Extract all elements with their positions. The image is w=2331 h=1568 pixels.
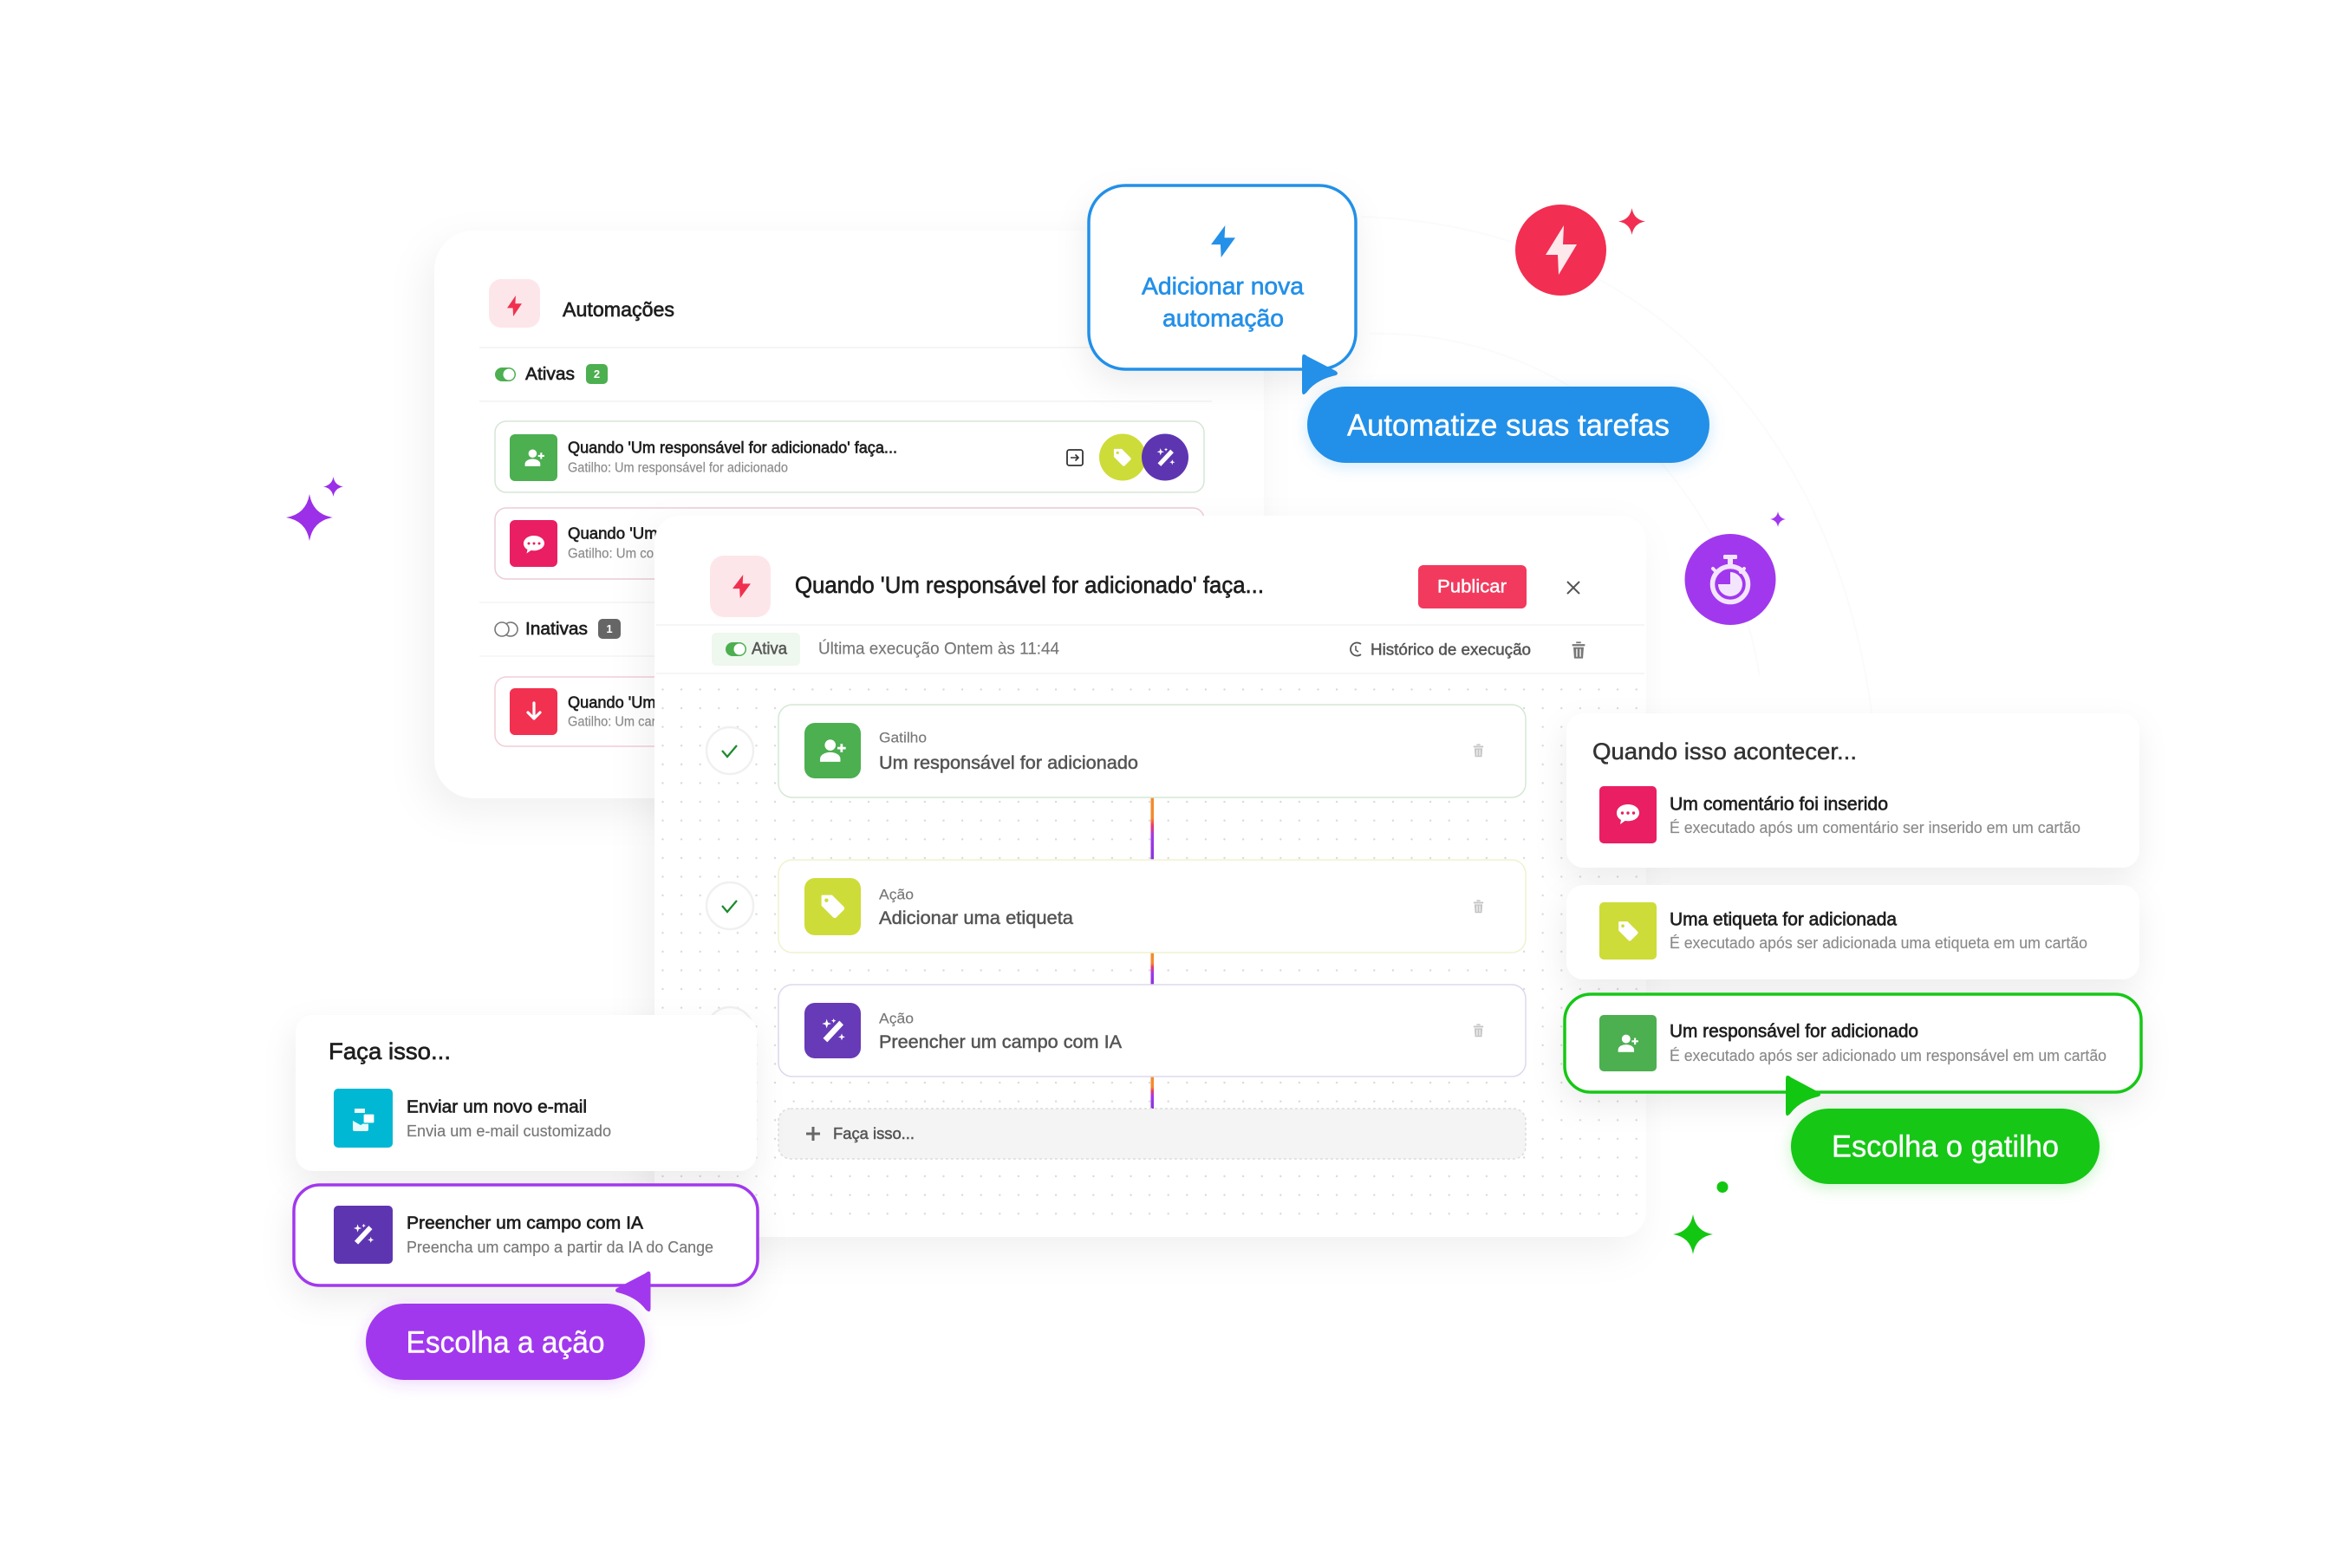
pill: Escolha o gatilho xyxy=(1791,1109,2100,1184)
card: add label action xyxy=(778,860,1526,953)
panel: action option AI selected xyxy=(294,1185,758,1285)
icon: green dot xyxy=(1716,1181,1729,1193)
panel: action option AI selected: Preencher um campo com IA xyxy=(407,1213,643,1233)
panel: trigger options heading and comment: Quando isso acontecer... xyxy=(1592,738,1857,764)
panel: action options heading and email: Enviar um novo e-mail xyxy=(407,1097,587,1116)
panel: trigger option label: É executado após ser adicionada uma etiqueta em um cartão xyxy=(1670,934,2087,952)
row: comment automation xyxy=(495,508,1204,579)
text: last execution: Última execução Ontem às 11:44 xyxy=(818,640,1059,659)
card: trigger step: Gatilho xyxy=(879,730,927,745)
panel: action option AI selected: Preencha um campo a partir da IA do Cange xyxy=(407,1239,713,1256)
callout: add new automation xyxy=(1089,185,1356,369)
callout: add new automation: Adicionar nova xyxy=(1142,272,1304,300)
panel: action options heading and email: Envia um e-mail customizado xyxy=(407,1122,611,1140)
panel: trigger options heading and comment: Um comentário foi inserido xyxy=(1670,794,1888,815)
pill: Escolha a ação xyxy=(366,1304,645,1380)
check: label action step xyxy=(706,882,753,929)
panel: trigger option label xyxy=(1566,885,2139,979)
heading: Automações: Automações xyxy=(563,298,674,321)
section: Inativas: 1 xyxy=(606,622,613,635)
panel: automation editor xyxy=(654,516,1646,1237)
arrow: purple cursor xyxy=(615,1272,650,1311)
decorative faint arcs xyxy=(1361,217,1872,719)
icon: close xyxy=(1567,582,1579,594)
card: trigger step: Um responsável for adicionado xyxy=(879,752,1138,773)
panel: trigger option responsible selected xyxy=(1565,994,2141,1092)
icon: purple sparkle small xyxy=(1770,511,1786,527)
pill: Escolha a ação: Escolha a ação xyxy=(406,1326,605,1359)
button: Publicar: Publicar xyxy=(1437,577,1507,596)
icon: editor bolt badge xyxy=(710,556,771,617)
panel: trigger options heading and comment: É executado após um comentário ser inserido em um cartão xyxy=(1670,819,2080,836)
card: trigger step xyxy=(778,705,1526,797)
button: Publicar xyxy=(1418,565,1527,608)
card: add label action: Ação xyxy=(879,886,914,903)
icon: automations bolt badge xyxy=(489,279,540,328)
connector: trigger to action xyxy=(1151,797,1154,860)
row: comment automation: Quando 'Um comentário foi inserido' faça... xyxy=(568,524,876,543)
row: responsible added automation: Gatilho: Um responsável for adicionado xyxy=(568,461,788,475)
section: Ativas: 2 xyxy=(594,368,600,381)
row: card moved automation xyxy=(495,677,1204,746)
panel: trigger option label: Uma etiqueta for adicionada xyxy=(1670,910,1897,929)
check: trigger step xyxy=(706,727,753,774)
row: card moved automation: Gatilho: Um cartão for movido xyxy=(568,714,736,730)
link: execution history: Histórico de execução xyxy=(1371,640,1531,659)
arrow: green cursor xyxy=(1786,1076,1820,1116)
section: Ativas xyxy=(495,364,608,384)
icon: stopwatch circle xyxy=(1685,534,1775,625)
card: add label action: Adicionar uma etiqueta xyxy=(879,908,1073,928)
icon: purple sparkle large xyxy=(286,494,333,541)
card: AI field action: Ação xyxy=(879,1011,914,1026)
row: responsible added automation: Quando 'Um responsável for adicionado' faça... xyxy=(568,439,897,456)
status: Ativa chip xyxy=(712,633,800,666)
panel: trigger options heading and comment xyxy=(1566,713,2139,868)
section: Inativas: Inativas xyxy=(525,620,588,639)
pill: Escolha o gatilho: Escolha o gatilho xyxy=(1832,1130,2059,1163)
callout: add new automation: automação xyxy=(1162,305,1284,331)
icon: green sparkle xyxy=(1673,1214,1713,1254)
panel: trigger option responsible selected: Um responsável for adicionado xyxy=(1670,1021,1918,1042)
button: add action: Faça isso... xyxy=(833,1125,915,1142)
heading: editor title: Quando 'Um responsável for adicionado' faça... xyxy=(795,572,1264,598)
icon: red sparkle xyxy=(1618,208,1645,235)
section: Inativas xyxy=(495,619,621,639)
arrow: blue cursor xyxy=(1302,355,1338,394)
row: responsible added automation xyxy=(495,421,1204,492)
check: AI action step xyxy=(706,1007,753,1054)
connector: action to action xyxy=(1151,953,1154,985)
panel: trigger option responsible selected: É executado após ser adicionado um responsável em um cartão xyxy=(1670,1047,2106,1064)
panel: action options heading and email xyxy=(296,1015,757,1171)
icon: purple sparkle tiny xyxy=(323,477,343,497)
status: Ativa chip: Ativa xyxy=(752,640,787,659)
row: card moved automation: Quando 'Um cartão for movido' faça... xyxy=(568,693,832,711)
panel: action options heading and email: Faça isso... xyxy=(329,1038,451,1064)
card: AI field action: Preencher um campo com IA xyxy=(879,1031,1123,1052)
card: AI field action xyxy=(778,985,1526,1077)
pill: Automatize suas tarefas xyxy=(1307,387,1709,463)
icon: red bolt circle xyxy=(1515,205,1606,296)
pill: Automatize suas tarefas: Automatize suas tarefas xyxy=(1347,409,1670,442)
row: comment automation: Gatilho: Um comentário foi inserido xyxy=(568,546,771,562)
button: add action xyxy=(778,1109,1526,1159)
connector: action to add xyxy=(1151,1077,1154,1109)
section: Ativas: Ativas xyxy=(525,365,575,384)
icon: delete automation xyxy=(1572,641,1585,659)
panel: automations list xyxy=(434,231,1264,798)
